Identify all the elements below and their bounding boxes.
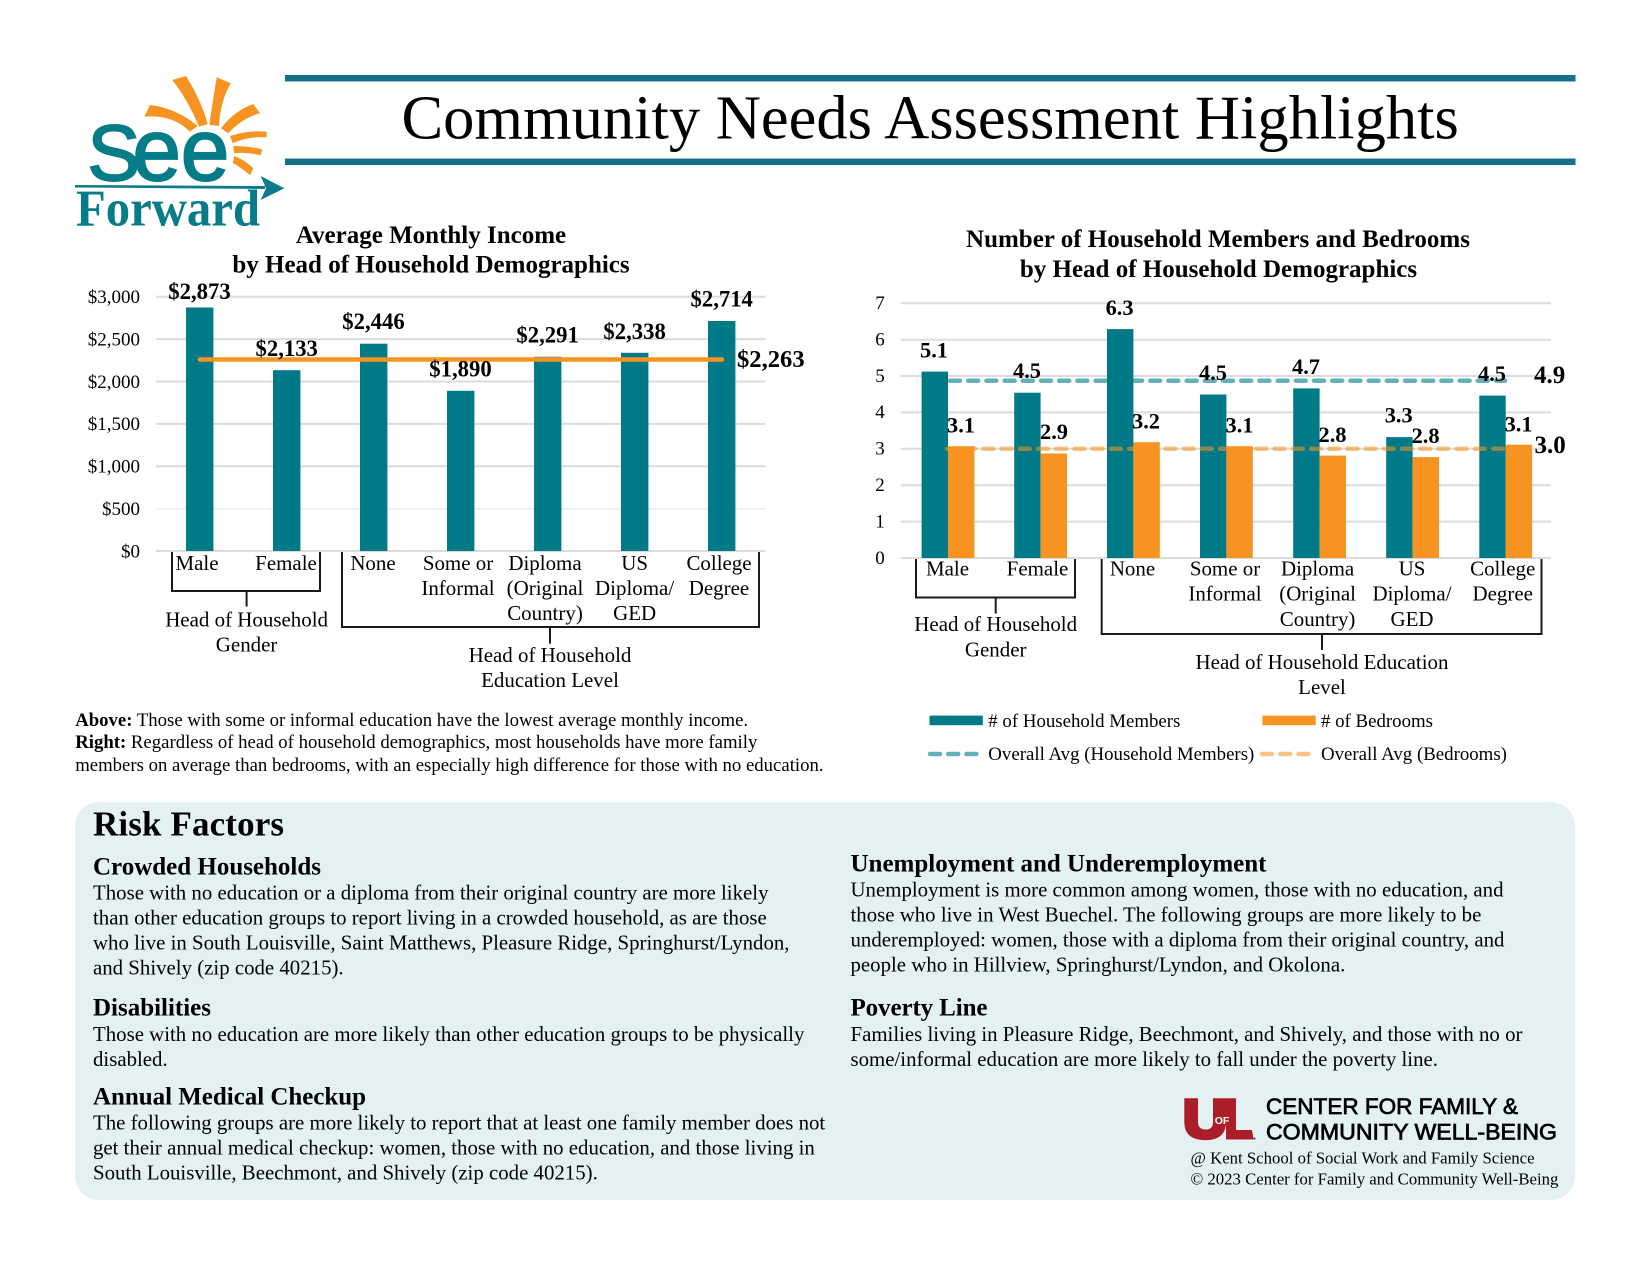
bracket: education group: [342, 552, 759, 692]
bar chart: bedrooms: [948, 442, 1532, 558]
block: unemployment: Unemployment and Underemployment: [850, 851, 1267, 878]
category labels: household: Female: [1007, 557, 1068, 581]
value labels: household: 4.5: [1013, 358, 1041, 383]
chart title: household: [966, 226, 1470, 283]
value labels: household: 3.1: [1505, 412, 1533, 437]
icon: arrow: [75, 176, 284, 200]
category labels: income: GED: [613, 601, 656, 625]
value labels: household: 4.9: [1534, 362, 1565, 389]
value labels: income: $2,291: [516, 322, 579, 348]
panel: household chart: [875, 226, 1566, 765]
chart title: income: [232, 222, 630, 278]
block: crowded households: than other education groups to report living in a crowded household, as are those: [93, 906, 767, 930]
bracket: gender group: [914, 559, 1078, 661]
block: unemployment: Unemployment is more common among women, those with no education, and: [850, 878, 1504, 902]
value labels: income: $2,338: [603, 319, 666, 344]
category labels: income: Diploma/: [595, 576, 674, 600]
bracket: education group: Level: [1298, 675, 1346, 699]
bracket: education group: Head of Household: [469, 643, 632, 667]
category labels: household: Diploma: [1281, 557, 1354, 581]
y axis labels: income: $1,500: [88, 414, 140, 435]
block: poverty line: some/informal education are more likely to fall under the poverty line.: [850, 1047, 1438, 1071]
bracket: education group: Education Level: [481, 668, 619, 692]
category labels: household: College: [1470, 557, 1535, 581]
y axis labels: household: 3: [875, 439, 885, 460]
text block: chart caption: Right: Regardless of head of household demographics, most households have more family: [75, 732, 758, 753]
legend: # of Household Members: [988, 711, 1180, 732]
y axis labels: income: $2,000: [88, 372, 140, 393]
icon: UL mark: OF: [1215, 1115, 1230, 1127]
center name: COMMUNITY WELL-BEING: [1266, 1119, 1557, 1144]
value labels: income: $2,446: [342, 309, 405, 334]
bracket: gender group: Gender: [216, 633, 277, 657]
y axis labels: household: 6: [875, 329, 885, 350]
value labels: household: 4.5: [1199, 360, 1227, 385]
block: crowded households: who live in South Louisville, Saint Matthews, Pleasure Ridge, Springhurst/Lyndon,: [93, 930, 790, 954]
category labels: income: (Original: [507, 576, 584, 600]
block: poverty line: Families living in Pleasure Ridge, Beechmont, and Shively, and those with no or: [850, 1022, 1522, 1046]
legend: Overall Avg (Bedrooms): [1321, 744, 1507, 765]
block: poverty line: [850, 995, 1522, 1071]
block: unemployment: people who in Hillview, Springhurst/Lyndon, and Okolona.: [850, 953, 1345, 977]
value labels: income: [168, 279, 805, 381]
block: unemployment: those who live in West Buechel. The following groups are more likely to be: [850, 903, 1481, 927]
affiliation and copyright: [1190, 1148, 1559, 1189]
y axis labels: income: $500: [102, 499, 140, 520]
value labels: household: 3.0: [1534, 432, 1566, 459]
category labels: income: US: [621, 551, 648, 575]
block: unemployment: underemployed: women, those with a diploma from their original country, and: [850, 928, 1505, 952]
category labels: household: (Original: [1279, 582, 1356, 606]
y axis labels: income: [88, 287, 140, 562]
block: disabilities: disabled.: [93, 1047, 168, 1071]
text block: chart caption: Above: Those with some or informal education have the lowest average monthly income.: [75, 710, 748, 731]
category labels: income: College: [686, 551, 752, 575]
category labels: income: Female: [255, 551, 317, 575]
block: crowded households: [93, 853, 790, 980]
bar chart: household members: [922, 329, 1506, 558]
value labels: household: 3.1: [947, 413, 975, 438]
value labels: income: $2,714: [691, 286, 753, 312]
block: unemployment: [850, 851, 1505, 977]
category labels: household: None: [1110, 557, 1155, 581]
title: Community Needs Assessment Highlights: [402, 82, 1459, 152]
category labels: income: Male: [175, 551, 219, 575]
logo word: See: [88, 102, 229, 199]
logo word: Forward: Forward: [76, 181, 260, 238]
category labels: household: Diploma/: [1372, 582, 1452, 606]
bracket: gender group: Head of Household: [914, 612, 1078, 636]
y axis labels: income: $3,000: [88, 287, 140, 308]
y axis labels: household: 4: [875, 402, 885, 423]
value labels: household: 2.8: [1318, 422, 1346, 447]
category labels: household: US: [1399, 557, 1425, 581]
category labels: income: Informal: [421, 576, 495, 600]
panel: income chart: [88, 222, 805, 692]
block: annual medical checkup: Annual Medical Checkup: [93, 1084, 366, 1111]
chart title: household: Number of Household Members and Bedrooms: [966, 226, 1470, 253]
chart title: household: by Head of Household Demographics: [1020, 256, 1417, 283]
value labels: income: $2,133: [256, 336, 318, 361]
value labels: household: 5.1: [920, 338, 948, 362]
category labels: household: Degree: [1472, 582, 1533, 606]
average line: income: [200, 357, 722, 362]
block: annual medical checkup: The following groups are more likely to report that at least one family member does not: [93, 1110, 825, 1134]
bracket: education group: [1102, 559, 1542, 699]
value labels: household: [920, 295, 1566, 459]
value labels: income: $1,890: [429, 356, 492, 381]
block: annual medical checkup: get their annual medical checkup: women, those with no education, and those living in: [93, 1136, 815, 1160]
value labels: household: 3.1: [1226, 413, 1254, 438]
value labels: income: $2,263: [737, 346, 805, 373]
value labels: household: 6.3: [1106, 295, 1134, 320]
value labels: household: 4.7: [1292, 354, 1320, 379]
block: disabilities: [93, 994, 805, 1071]
block: annual medical checkup: South Louisville, Beechmont, and Shively (zip code 40215).: [93, 1160, 598, 1184]
bracket: gender group: Gender: [965, 637, 1027, 661]
category labels: income: Country): [507, 601, 583, 625]
logo word: See: ee: [132, 102, 229, 199]
category labels: household: Male: [926, 557, 969, 581]
block: disabilities: Those with no education are more likely than other education groups to be physically: [93, 1022, 805, 1046]
category labels: household: Some or: [1190, 557, 1260, 581]
y axis labels: household: 5: [875, 366, 885, 387]
logo: UofL center: [1184, 1094, 1559, 1189]
value labels: household: 3.3: [1385, 402, 1413, 428]
y axis labels: income: $0: [121, 541, 140, 562]
logo: See Forward: [75, 76, 284, 238]
bracket: gender group: [165, 552, 329, 657]
value labels: household: 3.2: [1132, 409, 1160, 434]
header rule: bottom: [285, 158, 1576, 165]
block: poverty line: Poverty Line: [850, 995, 988, 1022]
legend: Overall Avg (Household Members): [988, 744, 1254, 765]
category labels: income: Some or: [423, 551, 493, 575]
category labels: household: Country): [1280, 607, 1355, 631]
chart title: income: by Head of Household Demographics: [232, 252, 630, 278]
category labels: income: [175, 551, 752, 625]
y axis labels: income: $2,500: [88, 329, 140, 350]
y axis labels: household: 1: [875, 511, 885, 532]
affiliation and copyright: @ Kent School of Social Work and Family Science: [1190, 1148, 1535, 1168]
value labels: income: $2,873: [168, 279, 231, 304]
text block: chart caption: [75, 710, 824, 776]
y axis labels: household: [875, 293, 885, 569]
affiliation and copyright: © 2023 Center for Family and Community Well-Being: [1190, 1170, 1559, 1189]
logo word: See: S: [88, 108, 140, 197]
chart title: income: Average Monthly Income: [296, 222, 566, 249]
category labels: income: Degree: [689, 576, 749, 600]
category labels: income: None: [350, 551, 396, 575]
legend: # of Bedrooms: [1321, 711, 1433, 732]
header rule: top: [285, 75, 1576, 82]
average line: household members: [950, 378, 1505, 383]
block: crowded households: Those with no education or a diploma from their original country are more likely: [93, 880, 769, 904]
y axis labels: household: 0: [875, 548, 885, 569]
value labels: household: 4.5: [1478, 361, 1506, 386]
bracket: education group: Head of Household Education: [1196, 650, 1449, 674]
block: crowded households: Crowded Households: [93, 853, 321, 880]
block: disabilities: Disabilities: [93, 994, 211, 1021]
average line: bedrooms: [947, 447, 1505, 451]
icon: UL mark: [1184, 1098, 1256, 1140]
bar chart: income bars: [186, 308, 735, 551]
icon: sun rays: [144, 76, 267, 175]
category labels: household: [926, 557, 1535, 631]
block: crowded households: and Shively (zip code 40215).: [93, 956, 344, 980]
y axis labels: income: $1,000: [88, 457, 140, 478]
value labels: household: 2.9: [1040, 419, 1068, 444]
category labels: household: GED: [1390, 607, 1434, 631]
y axis labels: household: 7: [875, 293, 885, 314]
text block: chart caption: members on average than bedrooms, with an especially high difference for those with no education.: [75, 755, 824, 776]
value labels: household: 2.8: [1412, 423, 1440, 448]
heading: risk factors: Risk Factors: [93, 805, 284, 844]
category labels: income: Diploma: [508, 551, 582, 575]
legend: [930, 711, 1507, 765]
category labels: household: Informal: [1188, 582, 1262, 606]
center name: CENTER FOR FAMILY &: [1266, 1094, 1518, 1119]
panel: risk factors: [75, 802, 1575, 1200]
y axis labels: household: 2: [875, 475, 885, 496]
block: annual medical checkup: [93, 1084, 825, 1184]
center name: [1266, 1094, 1557, 1144]
bracket: gender group: Head of Household: [165, 608, 329, 632]
